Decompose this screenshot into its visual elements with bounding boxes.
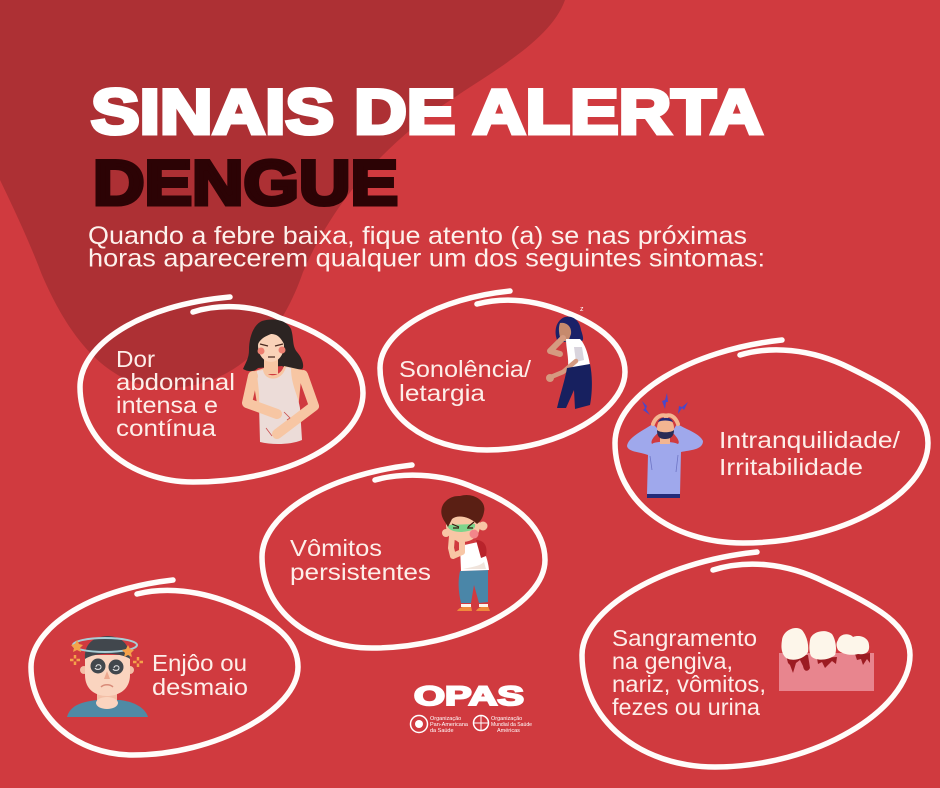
symptom text [719,427,901,480]
symptom text: Sonolência/ [399,356,532,382]
logo: OPAS: OPAS [414,681,524,711]
icon: dizzy man [67,636,148,717]
icon: woman with abdominal pain [243,320,314,444]
label: WHO name: Mundial da Saúde [491,722,532,728]
panel: intranquilidade [615,340,928,543]
symptom text [116,346,235,441]
symptom text: fezes ou urina [612,694,760,720]
symptom text: Enjôo ou [152,650,247,676]
symptom text: contínua [116,415,216,441]
label: PAHO name [430,716,469,734]
panel: enjoo [31,580,298,755]
symptom text [290,535,431,585]
symptom text: persistentes [290,559,431,585]
hand-drawn circle [262,465,545,648]
label: PAHO name: Pan-Americana [430,722,469,728]
symptom text: Sangramento [612,625,757,651]
logo: OPAS [410,681,532,734]
panel: dor abdominal [80,297,363,482]
symptom text: desmaio [152,674,248,700]
heading: dengue: DENGUE [93,149,398,219]
hand-drawn circle [615,340,928,543]
title: SINAIS DE ALERTA [91,78,763,148]
label: WHO name [491,716,532,734]
icon: sleepy woman: z [580,306,584,313]
background blob [0,0,565,388]
icon: boy feeling sick [441,495,490,611]
symptom text: Dor [116,346,155,372]
icon: sleepy woman [546,306,592,409]
intro text: horas aparecerem qualquer um dos seguintes sintomas: [88,244,765,272]
icon: stressed man [627,393,703,498]
symptom text [152,650,248,700]
emblem: WHO [474,716,488,731]
hand-drawn circle [582,552,910,767]
symptom text: nariz, vômitos, [612,671,766,697]
symptom text [612,625,766,720]
icon: bleeding gums [779,628,874,691]
label: PAHO name: Organização [430,716,461,722]
symptom text: Irritabilidade [719,454,863,480]
label: WHO name: Américas [497,728,520,734]
symptom text [399,356,532,406]
panel: vomitos [262,465,545,648]
panel: sangramento [582,552,910,767]
symptom text: na gengiva, [612,648,733,674]
hand-drawn circle [80,297,363,482]
hand-drawn circle [31,580,298,755]
intro text: Quando a febre baixa, fique atento (a) se nas próximas [88,222,747,250]
emblem: PAHO [410,716,428,732]
label: WHO name: Organização [491,716,522,722]
symptom text: Vômitos [290,535,382,561]
panel: sonolencia [380,291,625,450]
intro text [88,222,765,272]
hand-drawn circle [380,291,625,450]
symptom text: intensa e [116,392,218,418]
symptom text: abdominal [116,369,235,395]
label: PAHO name: da Saúde [430,728,454,734]
symptom text: letargia [399,380,485,406]
symptom text: Intranquilidade/ [719,427,901,453]
